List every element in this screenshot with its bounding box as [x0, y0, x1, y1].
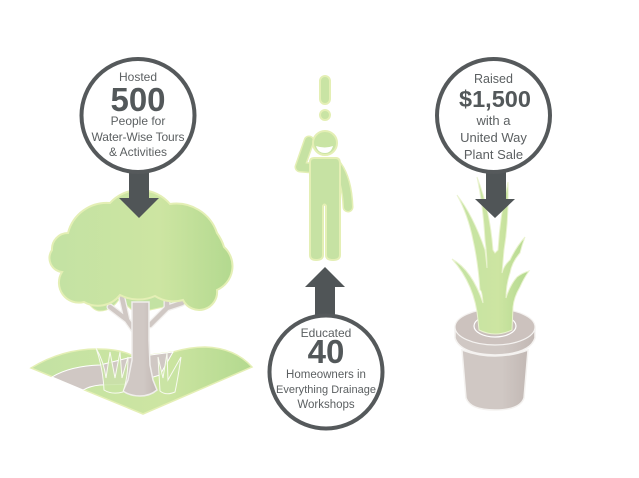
arrow: up to person — [305, 267, 345, 315]
tree crown — [49, 190, 232, 310]
callout: raised $1,500 — [437, 59, 550, 172]
illustration: potted plant — [452, 177, 535, 410]
pot opening — [474, 315, 516, 337]
callout: educated 40 — [270, 316, 382, 428]
callout: hosted 500: Hosted — [119, 70, 157, 84]
person head — [313, 131, 337, 155]
callout: raised $1,500: Plant Sale — [464, 147, 523, 162]
callout: educated 40: Workshops — [297, 399, 355, 411]
pot rim — [455, 327, 535, 355]
callout: hosted 500: People for — [111, 114, 165, 128]
icon: person — [300, 131, 348, 260]
tree branches — [110, 298, 182, 330]
callout: hosted 500 — [82, 59, 194, 172]
person body — [310, 158, 340, 260]
callout: raised $1,500: United Way — [460, 130, 527, 145]
callout: educated 40: Educated — [301, 326, 351, 340]
callout: educated 40: Everything Drainage — [276, 384, 376, 396]
grass tuft: right — [158, 353, 181, 394]
icon: exclamation mark — [320, 76, 330, 120]
callout: hosted 500: & Activities — [109, 145, 167, 159]
callout: raised $1,500: Raised — [474, 72, 513, 86]
lawn — [31, 347, 252, 414]
callout: hosted 500: Water-Wise Tours — [92, 130, 184, 144]
callout: educated 40: Homeowners in — [286, 369, 366, 381]
pot body — [462, 350, 528, 410]
callout: raised $1,500: with a — [476, 113, 511, 128]
grass tuft: left — [96, 348, 128, 393]
smile — [316, 146, 333, 153]
foliage behind branches — [86, 295, 182, 311]
illustration: tree on lawn — [31, 190, 252, 414]
arrow: down to tree — [119, 172, 159, 218]
garden path — [52, 352, 173, 390]
callout: educated 40: 40 — [308, 333, 344, 370]
callout: hosted 500: 500 — [110, 81, 166, 118]
person limbs outline — [300, 141, 348, 207]
arrow: down to plant — [475, 172, 515, 218]
plant leaves — [452, 177, 529, 334]
tree trunk — [123, 302, 157, 396]
callout: raised $1,500: $1,500 — [459, 86, 531, 112]
